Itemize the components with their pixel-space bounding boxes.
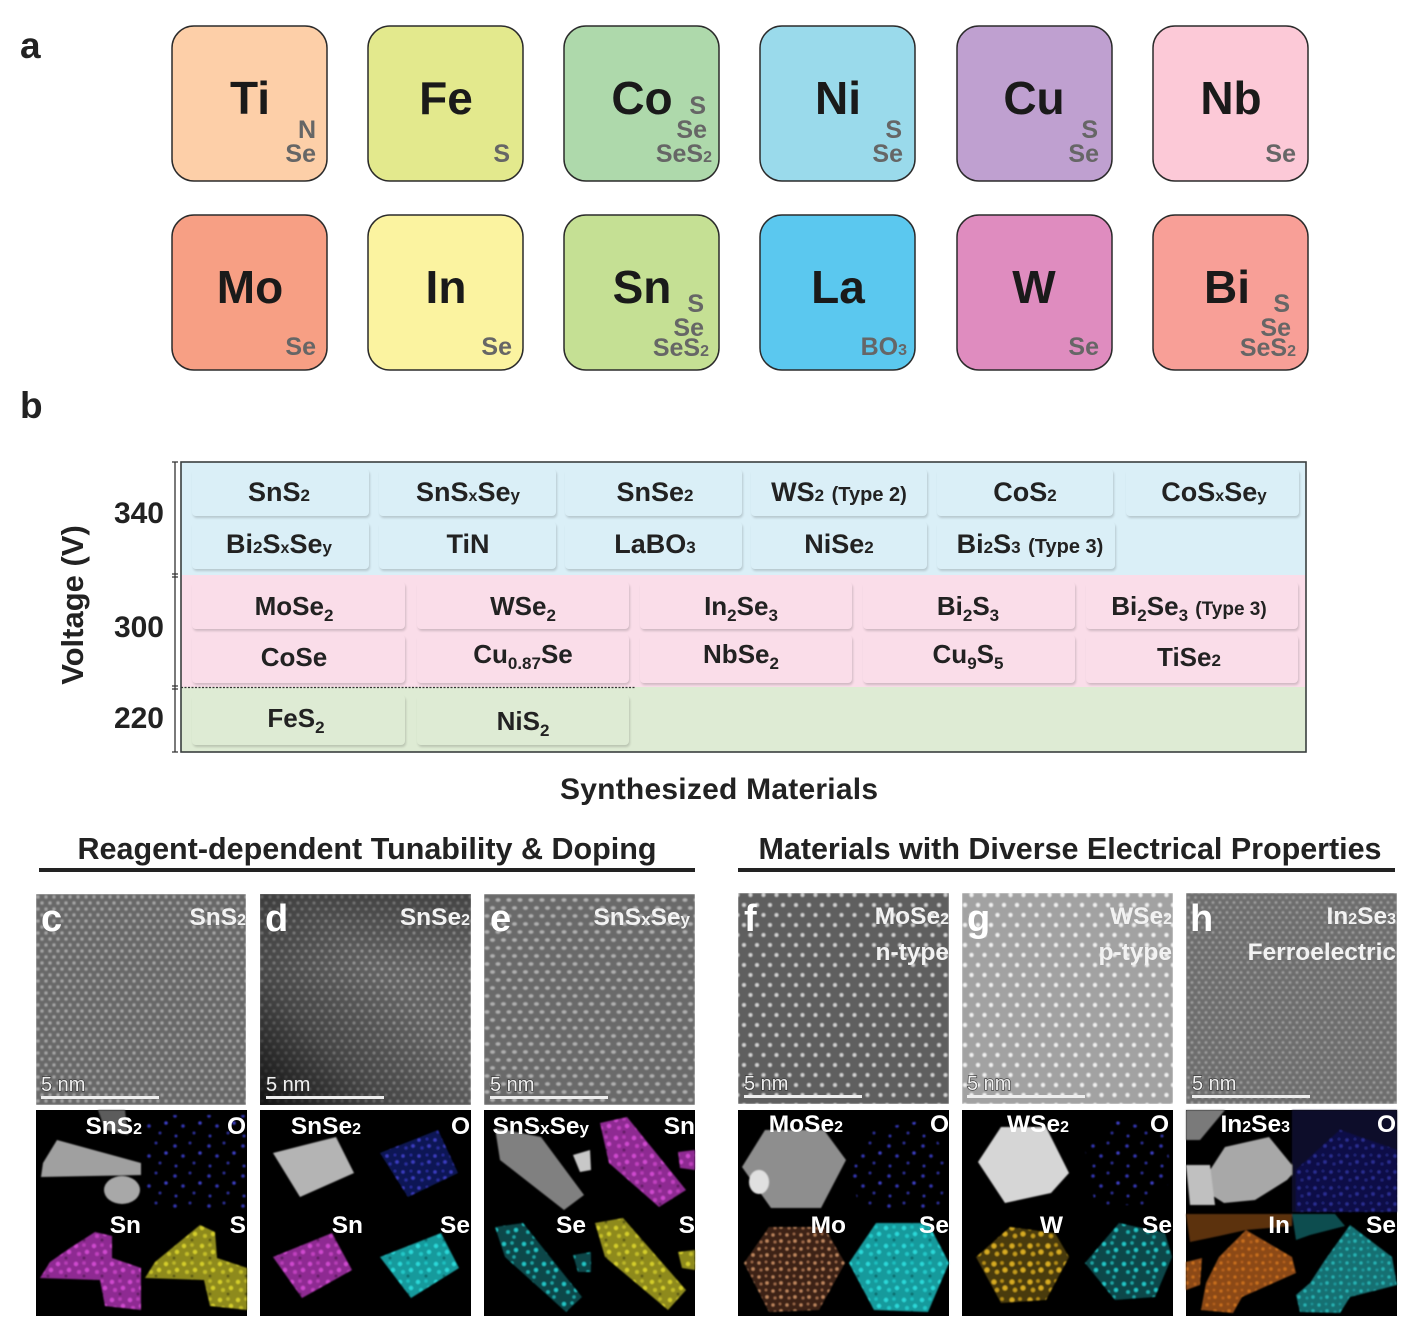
micrograph g: WSe2 (1110, 903, 1172, 930)
tile: Sn: S (687, 290, 704, 318)
chips: 340 V (192, 469, 1299, 569)
tile: Mo: Se (285, 333, 316, 361)
micrograph d (260, 894, 471, 1105)
tile: Ti: Se (285, 140, 316, 168)
material labels: Bi (1111, 591, 1137, 621)
tile: Nb: Se (1265, 140, 1296, 168)
micrograph h: h (1190, 898, 1213, 940)
tile: In: In (426, 261, 466, 313)
chips: 300 V (192, 582, 1298, 683)
tile: Cu: S (1081, 116, 1098, 144)
micrograph f: n-type (876, 939, 949, 966)
micrograph h: In2Se3 (1326, 903, 1396, 930)
tile: La: BO3 (861, 333, 907, 361)
EDS maps h: Se (1366, 1212, 1396, 1239)
micrograph c: 5 nm (41, 1074, 85, 1096)
material labels: 2 (546, 606, 556, 625)
material labels: Se (541, 639, 573, 669)
voltage tick labels: 300 (114, 611, 164, 644)
material labels: S (977, 639, 994, 669)
material labels: Cu (933, 639, 967, 669)
tile: Ni: Se (872, 140, 903, 168)
material labels: SnS2 (248, 477, 310, 507)
micrograph d: 5 nm (266, 1074, 310, 1096)
material labels: 0.87 (508, 654, 541, 673)
micrograph g (962, 893, 1173, 1104)
EDS maps c: O (227, 1113, 246, 1140)
material labels: FeS (267, 703, 315, 733)
micrograph h (1186, 893, 1397, 1104)
EDS maps e: SnSxSey (492, 1113, 590, 1140)
micrograph h: Ferroelectric (1248, 939, 1396, 966)
panel label: a: a (20, 25, 41, 66)
tile: Sn: Sn (613, 261, 671, 313)
tile: Bi: SeS2 (1240, 334, 1296, 362)
material labels: 3 (990, 606, 999, 625)
material labels: LaBO3 (614, 529, 696, 559)
EDS maps g: WSe2 (1007, 1111, 1069, 1138)
tile: W: Se (1068, 333, 1099, 361)
EDS maps h: In2Se3 (1220, 1111, 1290, 1138)
EDS maps e (484, 1110, 695, 1316)
tile: Mo: Mo (217, 261, 283, 313)
material labels (226, 477, 1267, 740)
voltage tick labels: 340 (114, 497, 164, 530)
material labels: 2 (540, 721, 549, 740)
micrograph e: 5 nm (490, 1074, 534, 1096)
material labels: NiS (497, 706, 540, 736)
material labels: 2 (963, 606, 972, 625)
panel label: b: b (20, 385, 43, 426)
micrograph g: 5 nm (967, 1073, 1011, 1095)
micrograph c: SnS2 (189, 904, 246, 931)
EDS maps d (260, 1110, 471, 1316)
tile: Fe: S (493, 140, 510, 168)
material labels: CoSe (261, 642, 327, 672)
x axis title: Synthesized Materials: Synthesized Materials (560, 773, 878, 806)
material labels: 2 (770, 654, 779, 673)
micrograph f: 5 nm (744, 1073, 788, 1095)
voltage tick labels: 220 (114, 702, 164, 735)
EDS maps e: S (679, 1212, 695, 1239)
table frame (181, 462, 1306, 752)
micrograph g: g (967, 898, 990, 940)
material labels: 3 (1179, 606, 1188, 625)
micrograph c: c (41, 898, 62, 940)
tile: Sn: Se (673, 314, 704, 342)
EDS maps d: SnSe2 (291, 1113, 361, 1140)
panel b: materials table (181, 462, 1306, 752)
material labels: SnSe2 (616, 477, 694, 507)
material labels: 2 (727, 606, 737, 625)
y axis title: Voltage (V): Voltage (V) (55, 525, 90, 685)
EDS maps c: S (230, 1212, 246, 1239)
material labels: CoSxSey (1161, 477, 1267, 507)
micrograph c (36, 894, 246, 1105)
EDS maps h: In (1268, 1212, 1290, 1239)
tile: Sn: SeS2 (653, 334, 709, 362)
EDS maps h: O (1377, 1111, 1396, 1138)
band: 300 V (181, 575, 1306, 687)
heading: Reagent-dependent Tunability & Doping: Reagent-dependent Tunability & Doping (78, 832, 656, 866)
material labels: 9 (967, 654, 977, 673)
tile: La: La (811, 261, 865, 313)
chips: 220 V (192, 695, 629, 745)
material labels: Bi (937, 591, 963, 621)
material labels: (Type 3) (1195, 599, 1267, 620)
micrograph e: SnSxSey (593, 904, 691, 931)
voltage axis bracket (172, 462, 178, 752)
tile: Ti (172, 26, 327, 181)
EDS maps g (962, 1110, 1173, 1316)
tile: Fe (368, 26, 523, 181)
tile: Ni (760, 26, 915, 181)
voltage tick labels (114, 497, 164, 735)
material labels: TiSe2 (1157, 642, 1221, 672)
material labels: 2 (1137, 606, 1147, 625)
material labels: WSe (490, 591, 546, 621)
tile: Co: SeS2 (656, 140, 712, 168)
EDS maps d: Se (440, 1212, 470, 1239)
EDS maps e: Sn (664, 1113, 695, 1140)
material labels: MoSe (255, 591, 324, 621)
band: 220 V (181, 687, 1306, 752)
tile: W: W (1012, 261, 1056, 313)
tile: Ni: S (885, 116, 902, 144)
EDS maps f (738, 1110, 949, 1316)
material labels: CoS2 (993, 477, 1057, 507)
EDS maps e: Se (556, 1212, 586, 1239)
material labels: NiSe2 (804, 529, 874, 559)
tile: Co: Se (676, 116, 707, 144)
tile: Ti: Ti (230, 72, 270, 124)
material labels: Bi2S3 (Type 3) (957, 529, 1103, 559)
material labels: S (972, 591, 990, 621)
material labels: 2 (315, 718, 325, 737)
tile: Cu: Cu (1003, 72, 1065, 124)
tile: Bi: S (1273, 290, 1290, 318)
heading: Materials with Diverse Electrical Properties: Materials with Diverse Electrical Properties (758, 832, 1382, 866)
tile: Nb: Nb (1200, 72, 1262, 124)
EDS maps f: Mo (811, 1212, 846, 1239)
tile: Fe: Fe (419, 72, 473, 124)
EDS maps g: Se (1142, 1212, 1172, 1239)
material labels: NbSe (703, 639, 770, 669)
micrograph d: SnSe2 (400, 904, 470, 931)
tile: Cu: Se (1068, 140, 1099, 168)
EDS maps g: W (1040, 1212, 1064, 1239)
tile: Mo (172, 215, 327, 370)
tile: Co: Co (611, 72, 673, 124)
material labels: Bi2SxSey (226, 529, 332, 559)
EDS maps d: Sn (332, 1212, 363, 1239)
tile: Bi (1153, 215, 1308, 370)
tile: In: Se (481, 333, 512, 361)
band: 340 V (181, 462, 1306, 575)
tile: Bi: Se (1260, 314, 1291, 342)
micrograph f (738, 893, 949, 1104)
material labels: In (704, 591, 727, 621)
material labels: Se (1147, 591, 1179, 621)
EDS maps g: O (1150, 1111, 1169, 1138)
micrograph f: f (744, 898, 757, 940)
tile: In (368, 215, 523, 370)
EDS maps f: Se (919, 1212, 949, 1239)
EDS maps f: O (930, 1111, 949, 1138)
micrograph e: e (490, 898, 511, 940)
tile: Co: S (689, 92, 706, 120)
material labels: Cu (473, 639, 508, 669)
tile: Ni: Ni (815, 72, 861, 124)
micrograph h: 5 nm (1192, 1073, 1236, 1095)
tile: Cu (957, 26, 1112, 181)
material labels: 5 (994, 654, 1003, 673)
material labels: WS2 (Type 2) (771, 477, 907, 507)
material labels: TiN (446, 529, 490, 559)
EDS maps h (1186, 1110, 1397, 1316)
material labels: 3 (768, 606, 778, 625)
micrograph d: d (265, 898, 288, 940)
micrograph e (484, 894, 695, 1105)
EDS maps f: MoSe2 (769, 1111, 843, 1138)
tile: Ti: N (298, 116, 316, 144)
tile: W (957, 215, 1112, 370)
tile: Bi: Bi (1204, 261, 1250, 313)
EDS maps c: Sn (110, 1212, 141, 1239)
material labels: SnSxSey (416, 477, 520, 507)
EDS maps c (36, 1110, 247, 1316)
micrograph f: MoSe2 (875, 903, 949, 930)
micrograph g: p-type (1098, 939, 1172, 966)
EDS maps c: SnS2 (85, 1113, 142, 1140)
tile: Co (564, 26, 719, 181)
tile: Nb (1153, 26, 1308, 181)
EDS maps d: O (451, 1113, 470, 1140)
tile: La (760, 215, 915, 370)
material labels: Se (737, 591, 768, 621)
material labels: 2 (324, 606, 333, 625)
tile: Sn (564, 215, 719, 370)
panel a: element tiles (172, 26, 1308, 370)
